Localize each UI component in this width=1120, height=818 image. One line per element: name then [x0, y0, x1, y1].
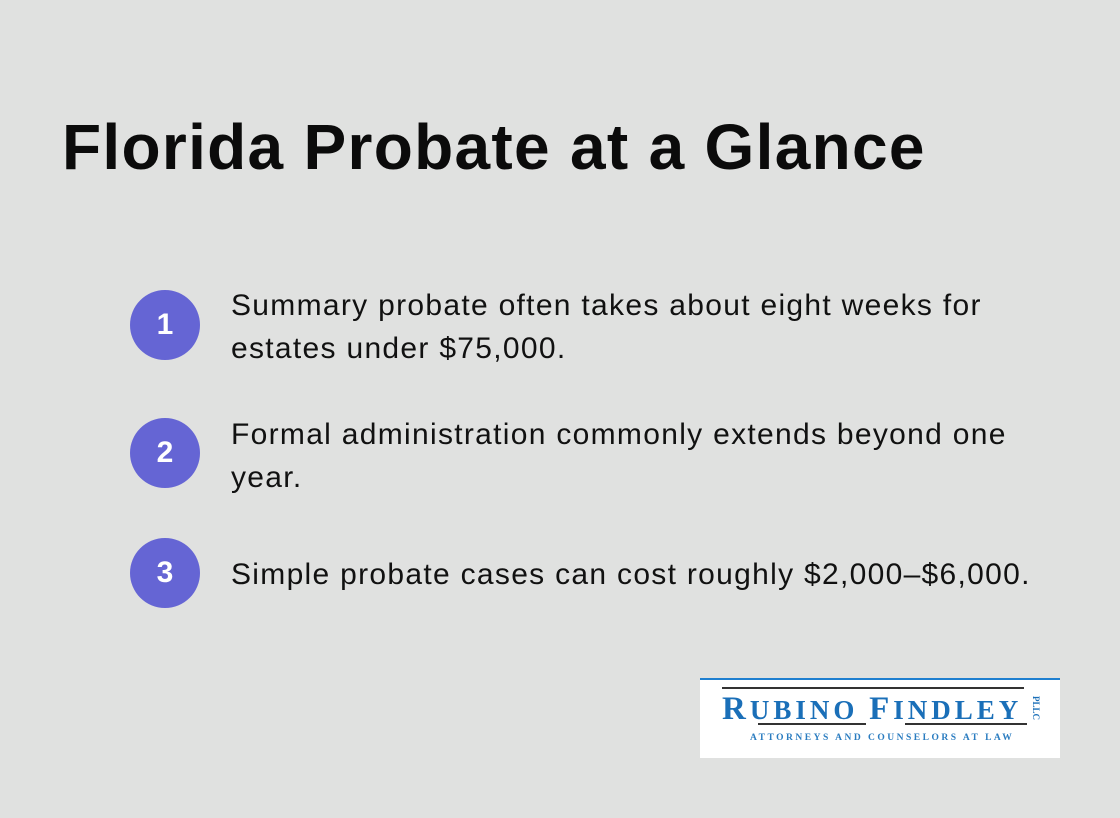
item 2 — [130, 418, 1007, 494]
text 1: Summary probate often takes about eight weeks for estates under $75,000. — [231, 289, 982, 365]
title: Florida Probate at a Glance — [62, 111, 926, 183]
number badge 1: 1 — [157, 308, 173, 341]
number badge 3 — [130, 538, 200, 608]
item 1 — [130, 289, 982, 365]
text 3: Simple probate cases can cost roughly $2,000–$6,000. — [231, 558, 1031, 591]
text 2: Formal administration commonly extends beyond one year. — [231, 418, 1007, 494]
number badge 2: 2 — [157, 436, 173, 469]
number badge 1 — [130, 290, 200, 360]
logo: Rubino Findley: ATTORNEYS AND COUNSELORS AT LAW — [750, 733, 1014, 743]
logo: Rubino Findley: RUBINO FINDLEY — [722, 691, 1022, 727]
number badge 3: 3 — [157, 556, 173, 589]
logo: Rubino Findley: PLLC — [1031, 696, 1041, 720]
number badge 2 — [130, 418, 200, 488]
item 3 — [130, 538, 1031, 608]
logo: Rubino Findley — [700, 678, 1060, 758]
